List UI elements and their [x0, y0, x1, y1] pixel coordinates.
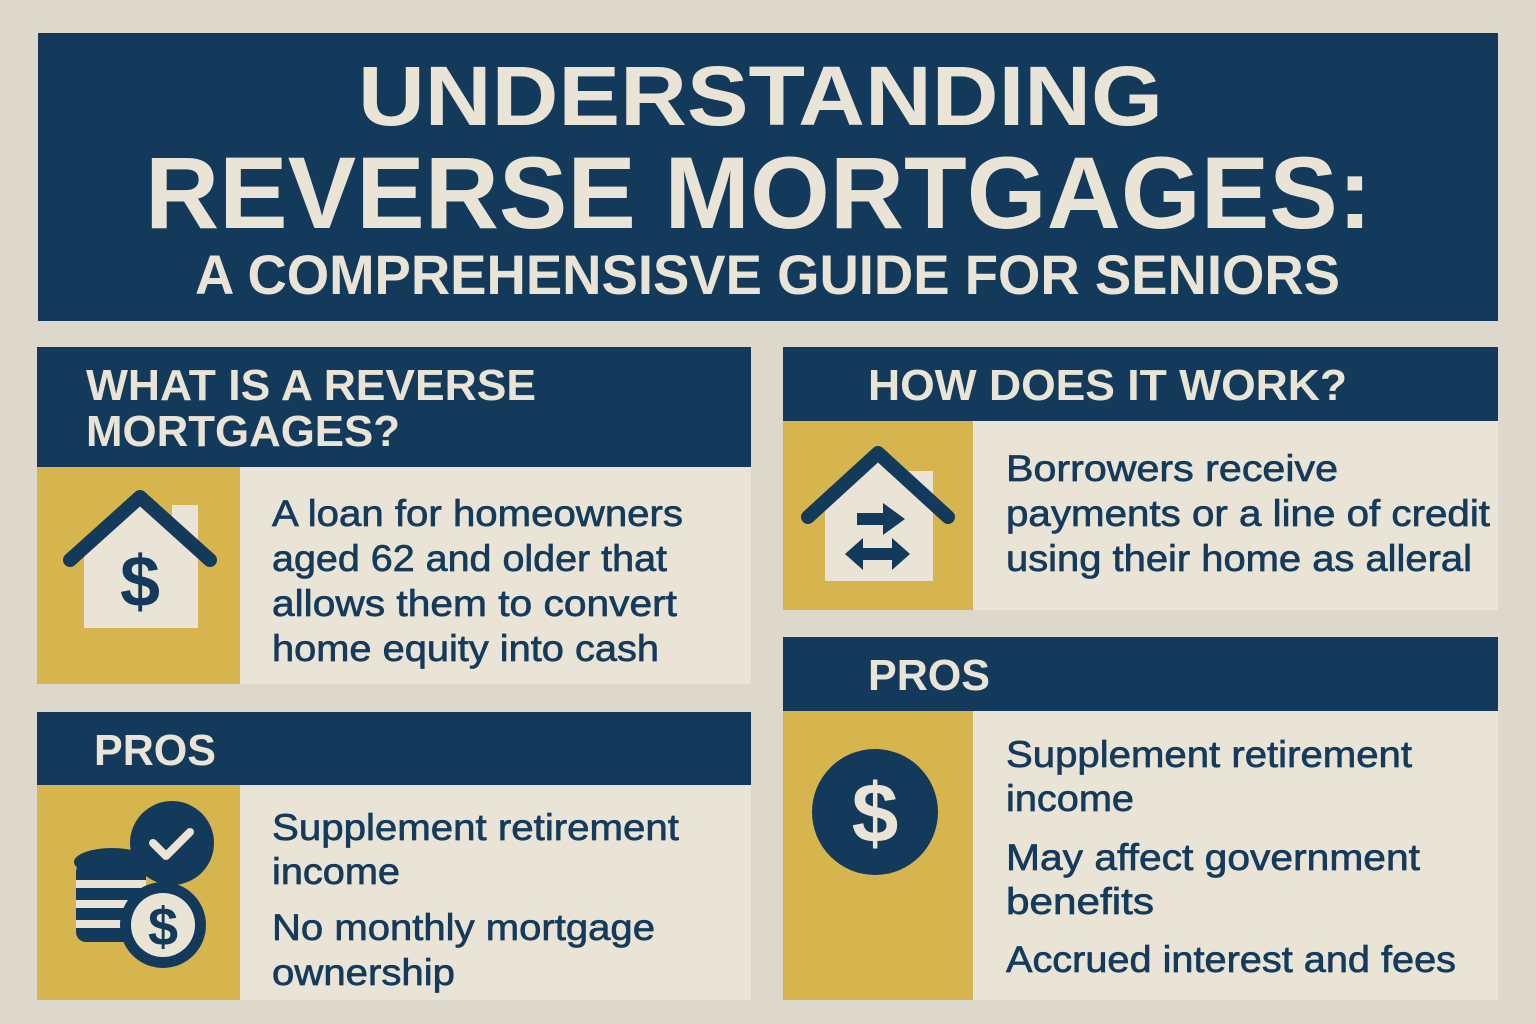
text: how it works: using their home as alleral	[1006, 538, 1472, 579]
title banner	[38, 33, 1498, 321]
text: definition	[272, 493, 683, 669]
text: pros list: Supplement retirement	[272, 807, 680, 848]
icon: house with dollar	[70, 497, 210, 628]
text: pros and cons list: Supplement retirement	[1006, 734, 1413, 775]
text: pros and cons list: May affect government	[1006, 837, 1421, 878]
icon: dollar circle: $	[852, 766, 898, 860]
text: definition: A loan for homeowners	[272, 493, 683, 534]
heading: what is: MORTGAGES?	[86, 407, 400, 456]
icon: house with dollar: $	[120, 542, 160, 622]
text: pros list: ownership	[272, 952, 455, 993]
panel: pros right	[783, 637, 1498, 1000]
text: pros and cons list: income	[1006, 778, 1134, 819]
text: how it works	[1006, 448, 1491, 579]
heading: what is	[86, 361, 536, 456]
icon: dollar circle	[812, 749, 938, 875]
text: pros and cons list: Accrued interest and fees	[1006, 939, 1456, 980]
text: pros list	[272, 807, 680, 993]
title	[145, 49, 1372, 250]
panel: what is a reverse mortgage	[37, 347, 751, 684]
panel: how does it work	[783, 347, 1498, 610]
text: pros and cons list	[1006, 734, 1456, 980]
text: how it works: Borrowers receive	[1006, 448, 1338, 489]
title: REVERSE MORTGAGES:	[145, 136, 1372, 250]
heading: what is: WHAT IS A REVERSE	[86, 361, 536, 410]
text: how it works: payments or a line of credit	[1006, 493, 1491, 534]
text: pros list: No monthly mortgage	[272, 907, 655, 948]
panel: pros left	[37, 712, 751, 1000]
text: definition: aged 62 and older that	[272, 538, 668, 579]
heading: pros: PROS	[94, 726, 216, 775]
text: pros and cons list: benefits	[1006, 881, 1154, 922]
icon: coins with check	[74, 801, 214, 968]
subtitle: A COMPREHENSISVE GUIDE FOR SENIORS	[195, 243, 1340, 306]
text: pros list: income	[272, 851, 400, 892]
text: definition: home equity into cash	[272, 628, 659, 669]
title: UNDERSTANDING	[358, 49, 1163, 143]
icon: coins with check: $	[148, 897, 178, 957]
heading: how does it work: HOW DOES IT WORK?	[868, 361, 1347, 410]
heading: pros right: PROS	[868, 651, 990, 700]
text: definition: allows them to convert	[272, 583, 678, 624]
icon: house with arrows	[808, 453, 948, 581]
